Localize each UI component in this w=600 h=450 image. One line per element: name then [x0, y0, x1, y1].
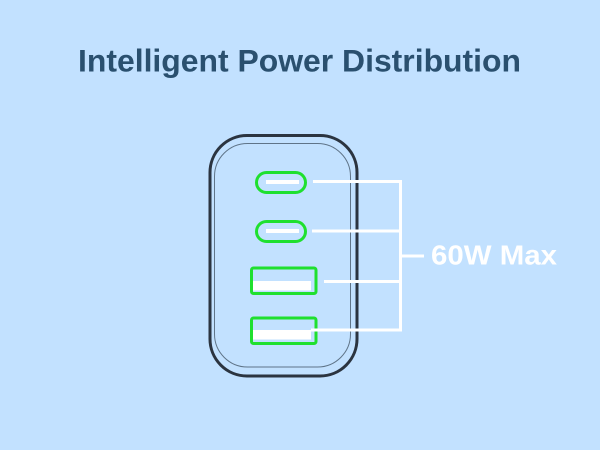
label: 60W Max: 60W Max [431, 240, 557, 270]
charger inner outline [214, 144, 350, 367]
charger body [210, 136, 357, 376]
bracket connector lines [311, 180, 424, 332]
port: USB-C 1 [256, 172, 306, 192]
charger outer outline [210, 136, 357, 376]
port: USB-A 1 [252, 268, 316, 294]
port: USB-C 2 [256, 222, 306, 242]
title: Intelligent Power Distribution [78, 42, 521, 78]
port: USB-A 2 [252, 318, 316, 344]
